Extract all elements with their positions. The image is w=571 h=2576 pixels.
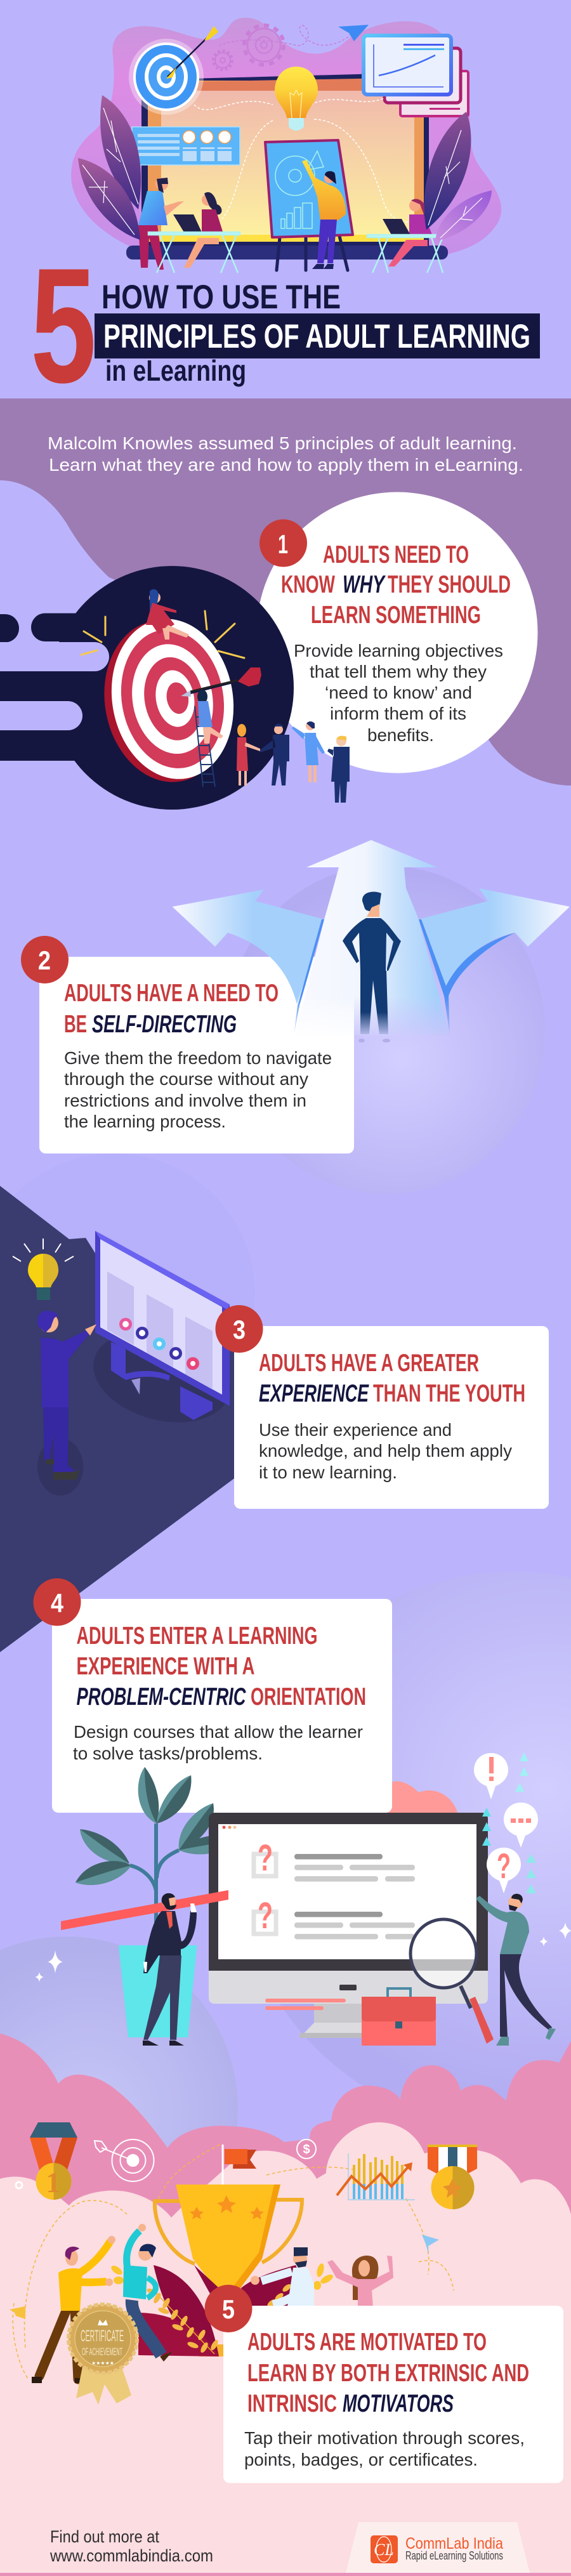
body 5: points, badges, or certificates.	[244, 2450, 478, 2469]
woman in red	[237, 724, 260, 785]
light pink cloud layer	[0, 2122, 571, 2576]
heading 2	[64, 980, 279, 1038]
number badge 4: 4	[51, 1588, 64, 1618]
white card 2	[39, 957, 354, 1153]
certificate badge: OF ACHIEVEMENT	[82, 2346, 122, 2358]
body 1: inform them of its	[330, 704, 466, 723]
body 4	[73, 1722, 363, 1763]
body 2: Give them the freedom to navigate	[64, 1048, 332, 1068]
dartboard	[92, 609, 246, 792]
faint circle left	[0, 1936, 238, 2279]
number badge 4	[33, 1579, 81, 1626]
heading 5: MOTIVATORS	[343, 2390, 454, 2417]
bottom strip	[0, 2573, 571, 2576]
gears	[213, 25, 350, 70]
body 5: Tap their motivation through scores,	[244, 2428, 525, 2448]
paper plane	[338, 25, 369, 41]
dark diagonal panel	[0, 1186, 236, 1652]
principle 4	[0, 1572, 571, 2279]
title line 1: HOW TO USE THE	[102, 279, 341, 316]
body 2: the learning process.	[64, 1112, 226, 1131]
body 3: Use their experience and	[259, 1420, 452, 1440]
heading 4	[76, 1622, 366, 1711]
logo wordmark: CommLab India	[405, 2535, 503, 2553]
body 1: Provide learning objectives	[294, 641, 503, 660]
principle 3	[0, 1153, 549, 1652]
four people talking	[237, 721, 350, 803]
potted plant	[75, 1767, 235, 2037]
left table	[148, 232, 240, 273]
man looking at the arrows	[343, 892, 401, 1042]
number badge 1	[259, 519, 307, 567]
heading 3: ADULTS HAVE A GREATER	[259, 1350, 479, 1377]
body 1: that tell them why they	[310, 662, 487, 681]
logo icon: CL	[374, 2540, 394, 2559]
standing man with blue shirt	[138, 178, 184, 270]
big screen frame	[141, 72, 429, 251]
heading 3	[259, 1350, 525, 1407]
woman sitting on the target	[146, 589, 189, 640]
info panel	[132, 127, 240, 165]
coral cloud behind the monitor	[387, 1782, 458, 1815]
number badge 5	[204, 2285, 253, 2332]
heading 3: EXPERIENCE	[259, 1380, 369, 1407]
heading 1	[281, 541, 511, 629]
pink cloud layer	[0, 2034, 571, 2284]
chart cards	[364, 36, 468, 116]
computer monitor with quiz	[209, 1813, 488, 2038]
right leaves	[424, 112, 492, 241]
principle 5	[0, 2034, 571, 2576]
yellow sprigs	[110, 2263, 334, 2290]
heading 4: EXPERIENCE WITH A	[76, 1653, 255, 1680]
sparkles	[35, 1922, 571, 1982]
white circle panel	[256, 492, 538, 773]
heading 4: ADULTS ENTER A LEARNING	[76, 1622, 317, 1650]
body 2: restrictions and involve them in	[64, 1091, 306, 1110]
right medal	[428, 2145, 477, 2209]
faint background circle	[0, 1153, 255, 1435]
paper plane	[422, 2235, 439, 2254]
purple intro band	[0, 398, 571, 785]
heading 2: SELF-DIRECTING	[92, 1011, 237, 1038]
businessman with pencil	[61, 1890, 228, 2046]
woman in pink	[327, 2256, 393, 2307]
target	[129, 26, 218, 115]
light bulb with rays	[13, 1239, 74, 1300]
quiz row 2: ?	[258, 1895, 273, 1936]
left leaves	[78, 95, 141, 240]
ladder	[195, 706, 215, 787]
magnifying glass	[410, 1919, 494, 2044]
number badge 3: 3	[233, 1315, 246, 1344]
woman on the ladder	[197, 690, 223, 744]
man in navy	[260, 723, 289, 785]
dashed connectors	[194, 98, 409, 222]
body 4: Design courses that allow the learner	[74, 1722, 363, 1742]
big number 5: 5	[30, 233, 96, 417]
white card 5	[223, 2306, 563, 2483]
left paper plane	[10, 2306, 25, 2319]
number badge 2	[21, 936, 69, 983]
right table	[367, 235, 444, 273]
dollar coin: $	[303, 2143, 310, 2157]
heading 1: KNOW	[281, 571, 335, 598]
intro text: Malcolm Knowles assumed 5 principles of adult learning.	[48, 433, 517, 453]
background egg shape	[226, 865, 545, 1194]
briefcase	[362, 1988, 436, 2046]
three direction arrows	[173, 840, 570, 1035]
principle 2	[21, 840, 570, 1157]
title bar	[95, 313, 540, 358]
principle 1	[0, 492, 538, 810]
heading 1: THEY SHOULD	[388, 571, 511, 598]
dark disc with stripes	[0, 566, 294, 810]
screen face	[161, 91, 414, 235]
body 2: through the course without any	[64, 1069, 308, 1089]
man in cyan sweater	[123, 2224, 173, 2362]
number badge 2: 2	[38, 945, 51, 975]
screen orange border	[148, 81, 424, 242]
speech bubbles	[474, 1753, 538, 1893]
quiz row 2	[254, 1895, 415, 1939]
speech bubbles: ?	[497, 1846, 511, 1886]
logo panel	[346, 2522, 530, 2573]
footer	[0, 2522, 571, 2576]
quiz row 1	[254, 1837, 415, 1882]
heading 4: PROBLEM-CENTRIC	[76, 1683, 246, 1711]
woman in blue	[292, 721, 325, 782]
certificate badge	[69, 2304, 137, 2405]
light bulb	[275, 67, 318, 131]
title	[30, 233, 540, 417]
dart	[181, 667, 261, 697]
body 3: knowledge, and help them apply	[259, 1441, 512, 1461]
white card 3	[234, 1326, 549, 1509]
laptop base	[126, 246, 448, 260]
growth chart	[337, 2153, 415, 2200]
hero illustration: people learning in front of a big screen	[71, 18, 501, 273]
heading 2: BE	[64, 1011, 87, 1038]
body 1: benefits.	[367, 725, 434, 745]
find out more text	[49, 2527, 213, 2565]
heading 1: WHY	[343, 571, 386, 598]
man in navy with blond hair	[327, 736, 350, 803]
left medal	[30, 2122, 77, 2200]
body 3	[259, 1420, 512, 1482]
body 1	[294, 641, 503, 745]
flag	[222, 2145, 256, 2186]
heading 2: ADULTS HAVE A NEED TO	[64, 980, 279, 1007]
heading 4: ORIENTATION	[251, 1683, 366, 1711]
flip chart	[265, 140, 353, 270]
certificate badge: ★★★★★	[91, 2360, 114, 2366]
seated woman with ponytail	[383, 199, 433, 266]
quiz row 1: ?	[258, 1837, 273, 1879]
left medal: 1	[46, 2166, 61, 2198]
man in white shirt	[251, 2247, 314, 2307]
number badge 1: 1	[278, 529, 288, 559]
target icon	[95, 2139, 154, 2181]
number badge 5: 5	[222, 2294, 235, 2324]
heading 1: ADULTS NEED TO	[323, 541, 469, 568]
body 3: it to new learning.	[259, 1462, 397, 1482]
intro text: Learn what they are and how to apply them in eLearning.	[49, 455, 523, 475]
dashed path	[13, 2143, 454, 2379]
man in yellow sweater	[32, 2236, 115, 2383]
maroon leaves with laurel	[138, 2265, 303, 2356]
background blob	[71, 18, 501, 255]
white card 4	[52, 1599, 392, 1813]
body 1: ‘need to know’ and	[325, 683, 472, 702]
spark lines	[81, 611, 244, 658]
presenter	[302, 160, 346, 269]
large faint circle right	[234, 1572, 571, 2130]
trophy	[155, 2185, 302, 2356]
body 4: to solve tasks/problems.	[73, 1744, 263, 1763]
certificate badge: CERTIFICATE	[81, 2327, 124, 2345]
seated woman with dark hair	[173, 192, 223, 268]
title line 3: in eLearning	[105, 354, 246, 387]
heading 5: INTRINSIC	[247, 2390, 337, 2417]
man with magnifying glass	[476, 1894, 556, 2046]
monitor shadow	[83, 1317, 240, 1436]
find out more text: www.commlabindia.com	[49, 2546, 213, 2565]
monitor with app icons	[95, 1231, 230, 1420]
logo icon	[371, 2535, 398, 2563]
presenter in purple suit	[37, 1311, 96, 1495]
heading 5	[247, 2329, 529, 2417]
small ring	[16, 2182, 22, 2188]
body 5	[244, 2428, 525, 2469]
logo tagline: Rapid eLearning Solutions	[405, 2549, 503, 2562]
number badge 3	[216, 1305, 263, 1353]
find out more text: Find out more at	[50, 2527, 159, 2546]
intro text	[48, 433, 523, 475]
cyan triangles	[482, 1752, 536, 1893]
heading 1: LEARN SOMETHING	[311, 601, 481, 629]
body 2	[64, 1048, 332, 1131]
dollar coin	[297, 2139, 316, 2159]
